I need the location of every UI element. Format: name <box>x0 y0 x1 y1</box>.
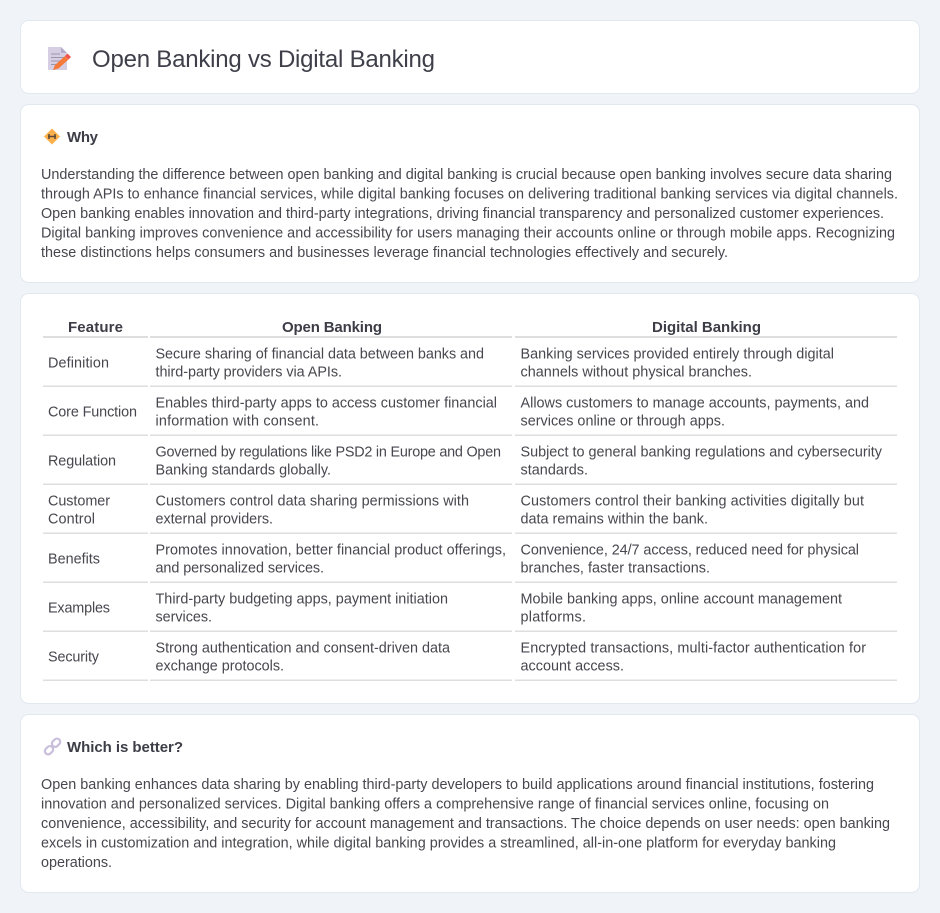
heading: why: Why <box>67 129 99 146</box>
row: security <box>43 640 897 681</box>
row: customer control: external providers. <box>156 512 273 528</box>
row: examples: services. <box>156 610 212 626</box>
row: definition: Secure sharing of financial data between banks and <box>156 346 484 362</box>
panel: header <box>20 20 920 94</box>
row: examples: platforms. <box>520 610 586 626</box>
row: customer control: Customer <box>48 494 110 510</box>
row: security: Security <box>48 650 100 666</box>
row: core function: Allows customers to manage accounts, payments, and <box>520 396 869 412</box>
table header: Open Banking <box>282 319 382 336</box>
heading: which is better: Which is better? <box>67 739 183 756</box>
table header: Digital Banking <box>652 319 761 336</box>
row: benefits <box>43 542 897 583</box>
row: customer control <box>43 494 897 534</box>
text block: why: Understanding the difference between open banking and digital banking is crucial because open banking involves secure data sharing <box>41 167 892 183</box>
panel: why <box>20 104 920 282</box>
row: examples <box>43 592 897 632</box>
row: security: exchange protocols. <box>156 658 284 674</box>
row: regulation: standards. <box>520 462 588 478</box>
text block: which is better: operations. <box>41 855 112 871</box>
row: definition <box>43 346 897 387</box>
row: regulation: Subject to general banking regulations and cybersecurity <box>520 444 883 460</box>
row: security: Encrypted transactions, multi-factor authentication for <box>520 640 866 656</box>
row: definition: channels without physical branches. <box>520 364 752 380</box>
row: core function: services online or through apps. <box>520 414 725 430</box>
row: definition: Banking services provided entirely through digital <box>520 346 834 362</box>
row: benefits: Convenience, 24/7 access, reduced need for physical <box>520 542 859 558</box>
panel: which is better <box>20 714 920 892</box>
text block: why <box>41 167 898 261</box>
row: customer control: Customers control data sharing permissions with <box>156 494 469 510</box>
row: regulation: Governed by regulations like PSD2 in Europe and Open <box>156 444 501 460</box>
text block: why: Digital banking improves convenience and accessibility for users managing their accounts online or through mobile apps. Recognizing <box>41 226 895 242</box>
table header <box>43 319 897 338</box>
row: benefits: and personalized services. <box>156 560 324 576</box>
row: core function <box>43 396 897 436</box>
row: examples: Third-party budgeting apps, payment initiation <box>156 592 448 608</box>
icon: link <box>44 737 62 756</box>
row: core function: Enables third-party apps to access customer financial <box>156 396 497 412</box>
text block: which is better: convenience, accessibility, and security for account management and transactions. The choice depends on user needs: open banking <box>41 816 890 832</box>
text block: why: Open banking enables innovation and third-party integrations, driving financial transparency and personalized customer experiences. <box>41 206 884 222</box>
text block: which is better <box>41 777 890 871</box>
icon: diamond sign <box>44 128 60 144</box>
row: regulation: Banking standards globally. <box>156 462 331 478</box>
text block: why: these distinctions helps consumers and businesses leverage financial technologies effectively and securely. <box>41 245 728 261</box>
row: examples: Examples <box>48 600 110 616</box>
row: benefits: branches, faster transactions. <box>520 560 710 576</box>
title: Open Banking vs Digital Banking <box>92 46 435 73</box>
panel: comparison table <box>20 294 920 704</box>
row: security: Strong authentication and consent-driven data <box>156 640 450 656</box>
text block: which is better: excels in customization and integration, while digital banking provides a streamlined, all-in-one platform for everyday banking <box>41 836 836 852</box>
row: regulation: Regulation <box>48 454 116 470</box>
row: benefits: Benefits <box>48 552 100 568</box>
row: security: account access. <box>520 658 624 674</box>
row: core function: Core Function <box>48 404 137 420</box>
row: examples: Mobile banking apps, online account management <box>520 592 842 608</box>
row: customer control: data remains within the bank. <box>520 512 708 528</box>
row: definition: Definition <box>48 356 109 372</box>
table header: Feature <box>68 319 123 336</box>
row: customer control: Customers control their banking activities digitally but <box>520 494 864 510</box>
row: regulation <box>43 444 897 485</box>
row: customer control: Control <box>48 512 95 528</box>
text block: which is better: Open banking enhances data sharing by enabling third-party developers to build applications around financial institutions, fostering <box>41 777 874 793</box>
row: core function: information with consent. <box>156 414 319 430</box>
icon: document with pencil <box>48 47 71 70</box>
row: benefits: Promotes innovation, better financial product offerings, <box>156 542 506 558</box>
row: definition: third-party providers via APIs. <box>156 364 342 380</box>
text block: which is better: innovation and personalized services. Digital banking offers a comprehensive range of financial services online, focusing on <box>41 796 829 812</box>
text block: why: through APIs to enhance financial services, while digital banking focuses on delivering traditional banking services via digital channels. <box>41 186 898 202</box>
